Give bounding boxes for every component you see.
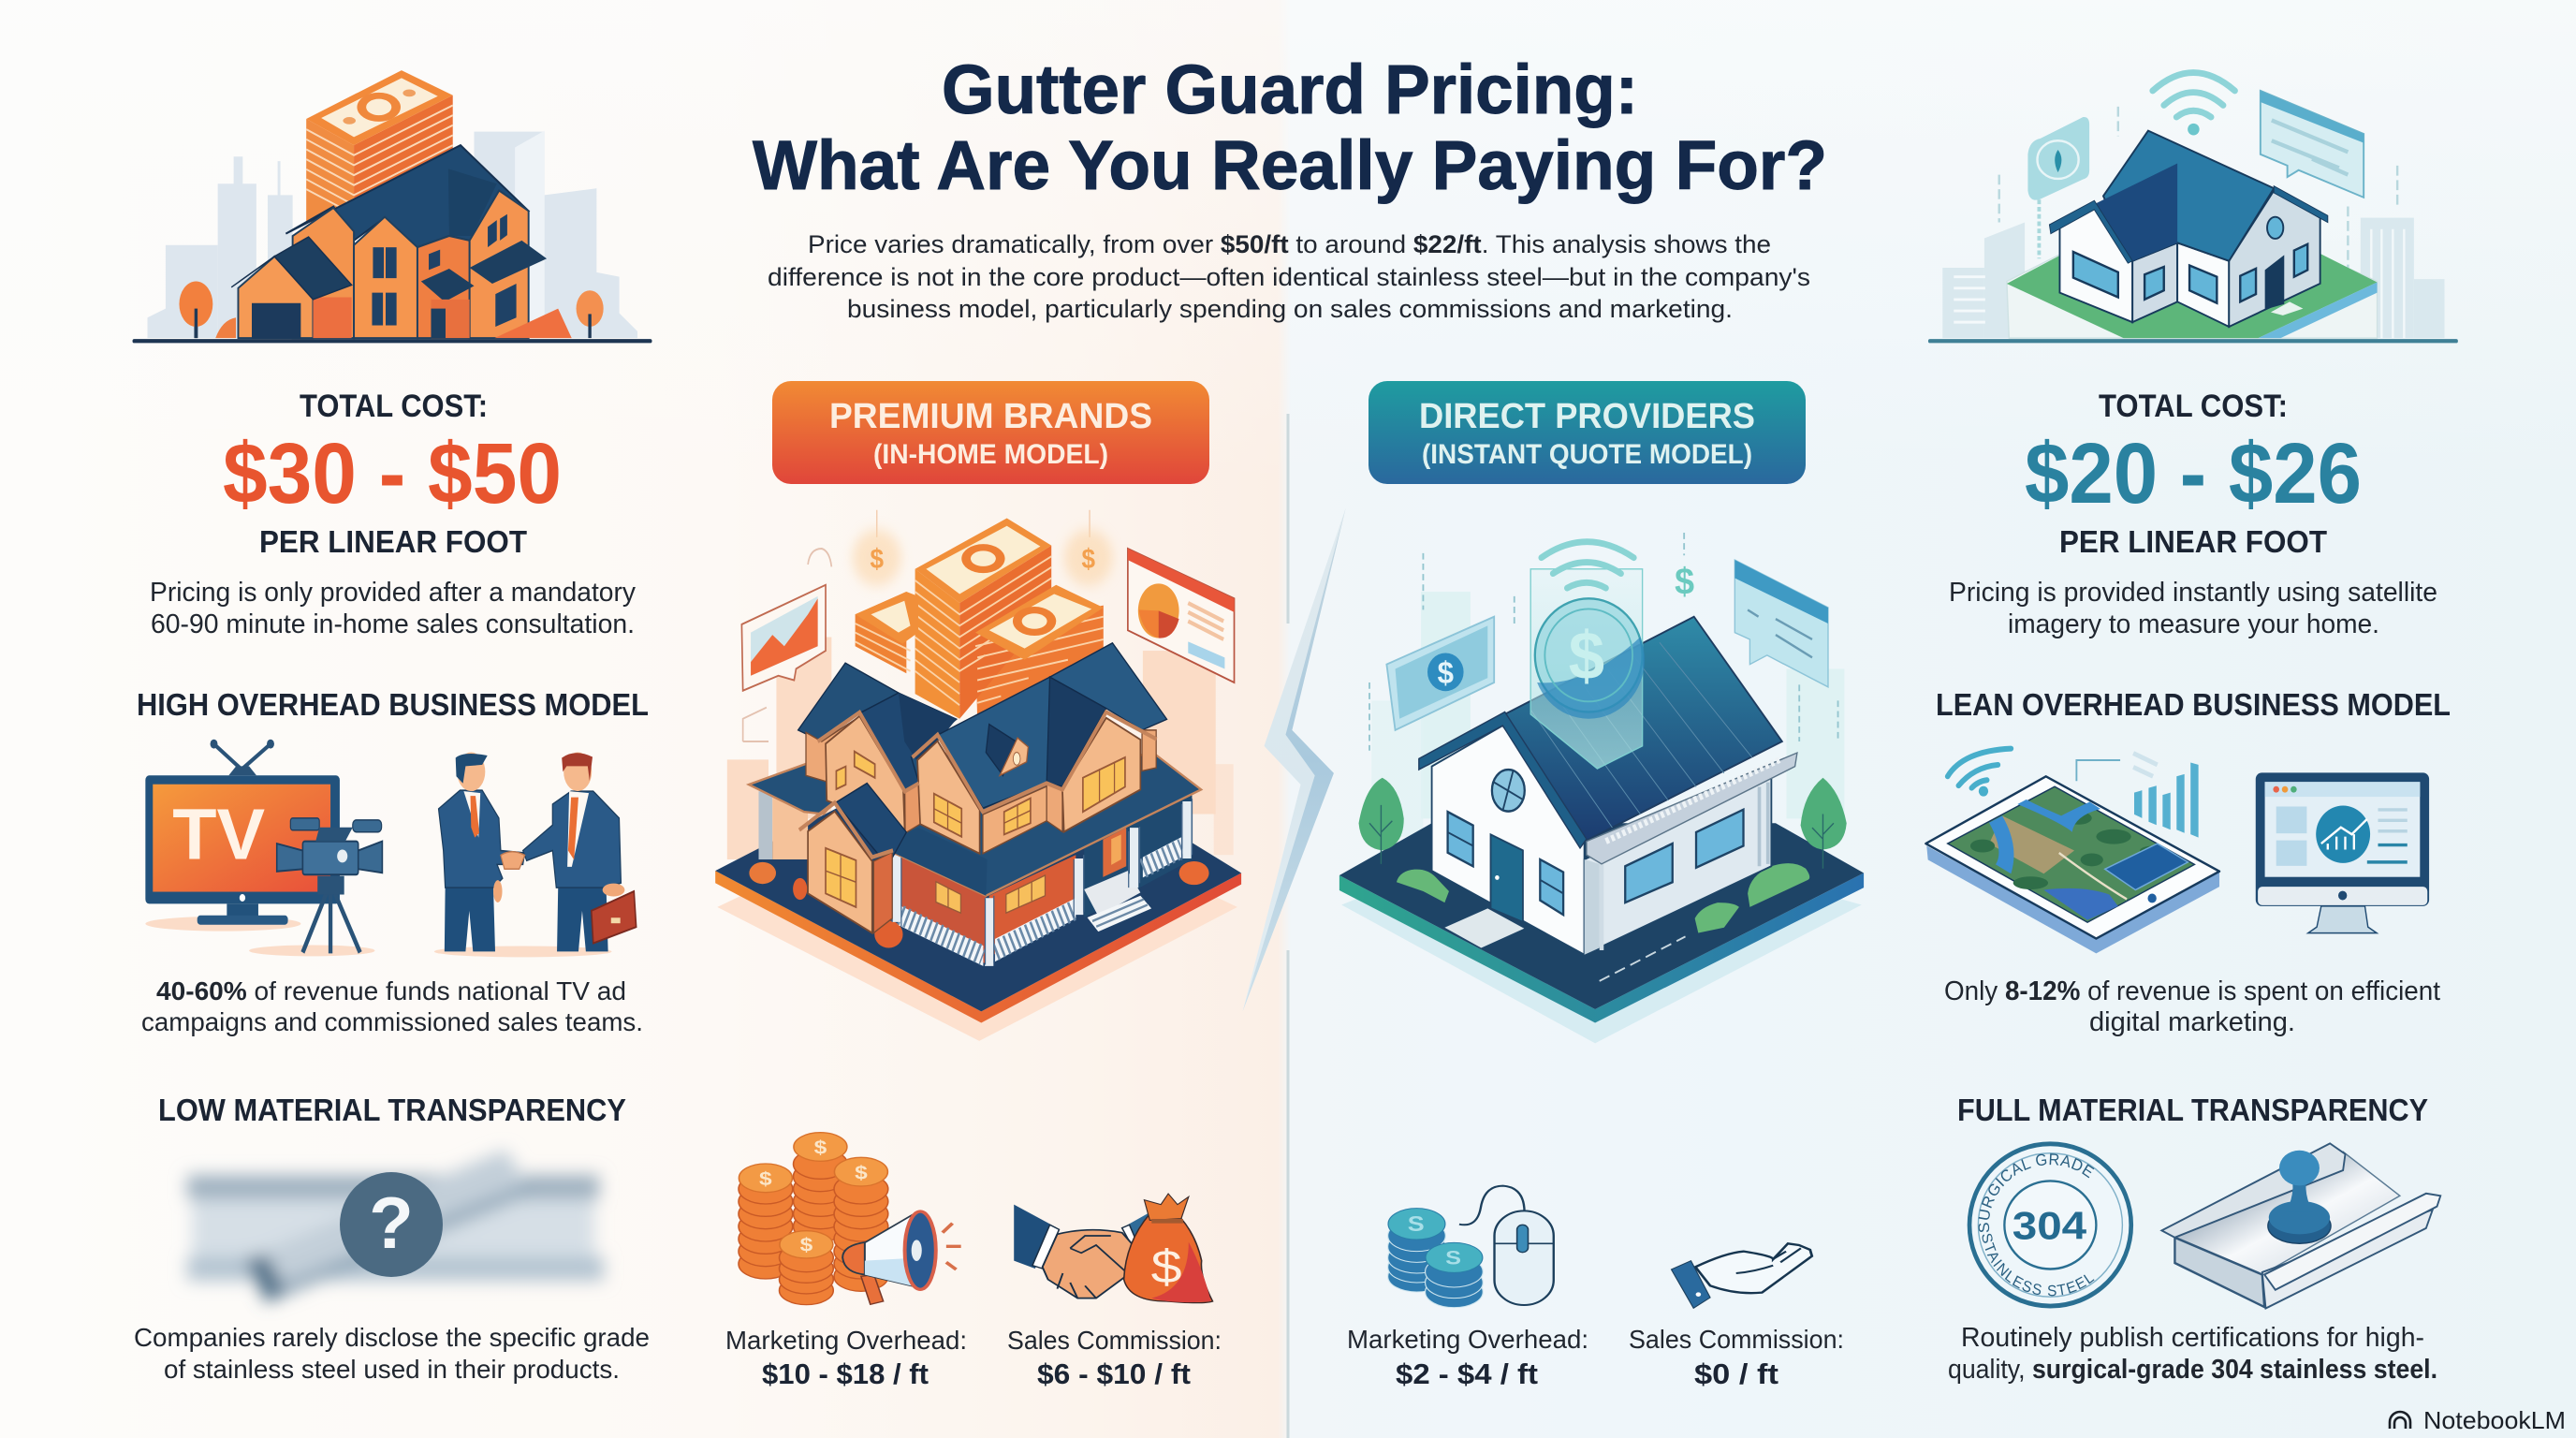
panel: direct side column [1925,69,2458,1385]
total cost block: PER LINEAR FOOT [2059,524,2327,559]
stat: marketing overhead direct [1347,1186,1588,1390]
icon: 304 certification seal [1968,1141,2134,1309]
house walls [806,716,859,791]
panel: direct providers center [1339,381,1864,1390]
header: premium brands: (IN-HOME MODEL) [873,439,1108,470]
windows [826,752,1125,907]
header: premium brands [772,381,1209,484]
total cost block: $30 - $50 [223,426,562,521]
eaves [799,712,1157,858]
icon: 304 certification seal: 304 [2012,1203,2086,1248]
icon: blurred steel with question mark [187,1150,604,1303]
stat: marketing overhead premium: $ [759,1167,772,1190]
floating chart cards [741,585,826,691]
heading: low transparency: LOW MATERIAL TRANSPARENCY [158,1093,626,1127]
stat: sales commission direct: Sales Commission: [1629,1325,1844,1354]
house walls [1432,726,1585,955]
pricing note: 60-90 minute in-home sales consultation. [151,609,635,639]
total cost block: PER LINEAR FOOT [259,524,527,559]
subtitle paragraph: Price varies dramatically, from over $50/ft to around $22/ft. This analysis shows the [808,230,1771,258]
tv campaign text: 40-60% of revenue funds national TV ad [156,976,626,1005]
roof [1505,617,1782,841]
platform [1339,873,1864,1023]
icon: steel gutter with stamp [2161,1143,2440,1309]
stat: sales commission premium [1007,1194,1222,1390]
stat: marketing overhead premium: $ [800,1234,813,1255]
house body [2059,207,2132,322]
certification text [1948,1323,2437,1385]
tv campaign text: campaigns and commissioned sales teams. [141,1007,643,1036]
platform [715,871,1241,1023]
stat: sales commission direct [1629,1243,1844,1390]
title: Gutter Guard Pricing: [942,51,1638,128]
certification text: Routinely publish certifications for high- [1961,1323,2424,1353]
gutter [1587,753,1797,864]
digital marketing text [1944,976,2440,1037]
icon: tv and camera [145,740,382,956]
stat: marketing overhead direct: S [1408,1212,1425,1236]
dormer [986,725,1016,775]
stat: sales commission premium: $6 - $10 / ft [1037,1357,1191,1390]
panel: premium side column [133,70,652,1384]
pricing note [1949,578,2437,639]
floating note [1386,617,1494,730]
stat: sales commission premium: Sales Commission: [1007,1326,1222,1355]
illustration: premium isometric house: $ [1082,543,1095,574]
icon: monitor dashboard [2256,772,2429,933]
grade disclosure text [134,1323,650,1384]
windows and door [1448,810,1744,915]
porch structure [758,791,772,859]
grade disclosure text: Companies rarely disclose the specific grade [134,1323,650,1352]
illustration: premium isometric house [715,510,1241,1041]
watermark: NotebookLM: NotebookLM [2423,1406,2566,1434]
title [753,51,1827,204]
stat: marketing overhead premium: $ [814,1137,827,1158]
digital marketing text: digital marketing. [2089,1007,2295,1037]
upper roof [798,663,899,741]
icon: 304 certification seal: STAINLESS STEEL [1983,1234,2095,1296]
railings [899,837,1182,966]
illustration: house with money stack [133,70,652,343]
header: premium brands: PREMIUM BRANDS [829,397,1152,436]
icon: salespeople handshake [434,753,637,957]
heading: full transparency: FULL MATERIAL TRANSPARENCY [1957,1093,2428,1127]
floating browser [1734,560,1828,687]
header: direct providers: (INSTANT QUOTE MODEL) [1422,439,1752,470]
title block [753,51,1827,323]
total cost block: TOTAL COST: [300,389,488,424]
illustration: premium isometric house: $ [871,543,884,574]
total cost block: $20 - $26 [2025,426,2362,521]
stat: sales commission premium: $ [1151,1240,1182,1293]
icon: satellite tablet [1925,749,2219,953]
wifi and dollar [1542,542,1633,588]
total cost block [223,389,562,559]
back coin stacks [739,1149,888,1291]
subtitle paragraph: business model, particularly spending on sales commissions and marketing. [847,295,1733,323]
illustration: direct isometric house: $ [1438,655,1454,690]
glass column and coin [1530,569,1643,769]
title: What Are You Really Paying For? [753,126,1827,204]
grade disclosure text: of stainless steel used in their products. [164,1355,620,1384]
panel: premium brands center [715,381,1241,1390]
money stacks [856,592,906,673]
stat: marketing overhead premium: $ [855,1161,868,1183]
heading: lean overhead: LEAN OVERHEAD BUSINESS MODEL [1936,687,2451,722]
heading: high overhead: HIGH OVERHEAD BUSINESS MODEL [137,687,649,722]
illustration: direct isometric house [1339,533,1864,1043]
digital marketing text: Only 8-12% of revenue is spent on efficient [1944,976,2440,1006]
subtitle paragraph [768,230,1810,323]
header: direct providers [1368,381,1806,484]
pricing note [150,578,636,639]
pricing note: imagery to measure your home. [2008,609,2379,639]
illustration: smart house with wifi [1928,73,2458,343]
trees and bushes [1359,778,1404,850]
illustration: direct isometric house: $ [1569,618,1604,695]
stat: marketing overhead premium [725,1133,967,1390]
stat: marketing overhead direct: Marketing Overhead: [1347,1325,1588,1354]
icon: tv and camera: TV [172,794,265,874]
pricing note: Pricing is only provided after a mandatory [150,578,636,608]
stat: marketing overhead premium: $10 - $18 / ft [762,1357,929,1390]
icon: 304 certification seal: SURGICAL GRADE [1979,1153,2095,1232]
total cost block: TOTAL COST: [2099,389,2288,424]
stat: marketing overhead premium: Marketing Overhead: [725,1326,967,1355]
stat: sales commission direct: $0 / ft [1694,1357,1778,1390]
stat: marketing overhead direct: $2 - $4 / ft [1396,1357,1538,1390]
pricing note: Pricing is provided instantly using satellite [1949,578,2437,608]
icon: blurred steel with question mark: ? [369,1181,414,1264]
stat: marketing overhead direct: S [1445,1247,1461,1269]
header: direct providers: DIRECT PROVIDERS [1419,397,1755,436]
tv campaign text [141,976,643,1036]
certification text: quality, surgical-grade 304 stainless steel. [1948,1355,2437,1385]
subtitle paragraph: difference is not in the core product—often identical stainless steel—but in the company's [768,263,1810,291]
illustration: direct isometric house: $ [1675,562,1694,603]
center divider with lightning bolt [1243,414,1346,1438]
total cost block [2025,389,2362,559]
